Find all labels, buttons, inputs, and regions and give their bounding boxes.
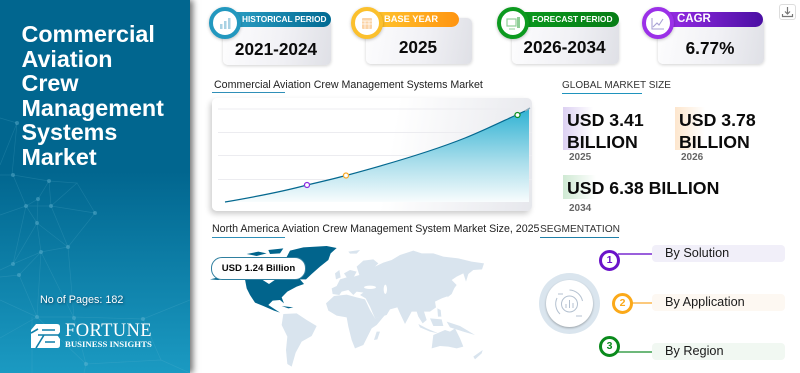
number badge 2: 2 (620, 297, 625, 309)
number badge 1: 1 (607, 254, 612, 266)
year: 2025 (569, 152, 591, 163)
logo text: FORTUNE (65, 321, 152, 341)
pill label: CAGR (677, 13, 711, 25)
heading underline (562, 93, 642, 94)
value: 2021-2024 (235, 39, 317, 59)
year: 2026 (681, 152, 703, 163)
heading: segmentation: SEGMENTATION (540, 224, 620, 235)
tint (563, 107, 593, 150)
icon: FB mark (31, 324, 60, 348)
heading underline (212, 92, 285, 93)
connector: by region (618, 351, 653, 353)
network pattern (0, 118, 190, 373)
connector: by solution (618, 253, 653, 255)
inland seas (364, 285, 387, 294)
North America highlighted (210, 246, 337, 313)
segment: by application (652, 294, 785, 311)
pill label (371, 12, 459, 27)
value (679, 110, 756, 152)
icon ring (497, 7, 529, 39)
market size: 2026 (675, 107, 756, 163)
card body (512, 18, 619, 64)
stat card: CAGR (640, 6, 766, 66)
heading underline (212, 237, 285, 238)
value: 6.77% (686, 38, 734, 58)
heading: market chart: Commercial Aviation Crew Management Systems Market (214, 79, 483, 91)
logo: Fortune Business Insights (31, 321, 152, 348)
stat card: forecast period (496, 6, 620, 66)
card body (658, 18, 764, 64)
icon ring (351, 7, 383, 39)
segment: by region: By Region (665, 344, 724, 358)
icon: download button (779, 4, 796, 20)
number badge 3 (599, 336, 620, 357)
number badge 2 (612, 293, 633, 314)
title: Crew (22, 70, 78, 96)
callout: USD 1.24 Billion (211, 257, 306, 284)
panel: left sidebar (0, 0, 190, 373)
segmentation hub icon (539, 273, 600, 334)
year: 2034 (569, 203, 591, 214)
area chart (218, 108, 530, 203)
value: USD 3.78 (679, 110, 756, 130)
heading underline (540, 237, 619, 238)
pill label (662, 12, 763, 27)
value: 2025 (399, 37, 437, 57)
card body (366, 18, 472, 64)
title: Market (22, 144, 97, 170)
stat card: historical period (208, 6, 332, 68)
segment: by solution: By Solution (665, 246, 729, 260)
tint (675, 107, 705, 150)
page count: No of Pages: 182 (40, 294, 123, 306)
world map (210, 246, 484, 366)
segment: by region (652, 343, 785, 360)
tint (563, 175, 596, 199)
value: USD 3.41 (567, 110, 644, 130)
pill label: HISTORICAL PERIOD (242, 14, 327, 24)
heading: regional map: North America Aviation Crew Management System Market Size, 2025 (212, 223, 539, 235)
number badge 1 (599, 250, 620, 271)
pill label (229, 12, 331, 27)
market size: 2025 (563, 107, 644, 163)
pill label (517, 12, 619, 27)
connector: by application (631, 302, 653, 304)
callout tail (262, 280, 275, 284)
chart card: market growth (212, 98, 532, 211)
pill label: FORECAST PERIOD (532, 14, 612, 24)
title: Systems (22, 119, 117, 145)
market size: 2034 (563, 175, 719, 214)
callout label: USD 1.24 Billion (222, 263, 295, 274)
title: Aviation (22, 46, 113, 72)
heading: global market size: GLOBAL MARKET SIZE (562, 80, 671, 91)
rest of world (282, 250, 484, 367)
logo subtext: BUSINESS INSIGHTS (65, 338, 152, 348)
number badge 3: 3 (607, 340, 612, 352)
title: Management (22, 94, 164, 120)
icon ring (642, 7, 674, 39)
stat card: base year (350, 6, 474, 66)
title (22, 21, 164, 170)
value: BILLION (679, 132, 750, 152)
value: BILLION (567, 132, 638, 152)
segment: by application: By Application (665, 295, 745, 309)
title: Commercial (22, 21, 155, 47)
callout label (211, 257, 306, 280)
value: USD 6.38 BILLION (567, 178, 719, 198)
value (567, 110, 644, 152)
card body (223, 19, 331, 65)
value: 2026-2034 (523, 37, 606, 57)
icon ring (209, 7, 241, 39)
pill label: BASE YEAR (384, 14, 438, 24)
hub disc (546, 280, 593, 327)
segment: by solution (652, 245, 785, 262)
